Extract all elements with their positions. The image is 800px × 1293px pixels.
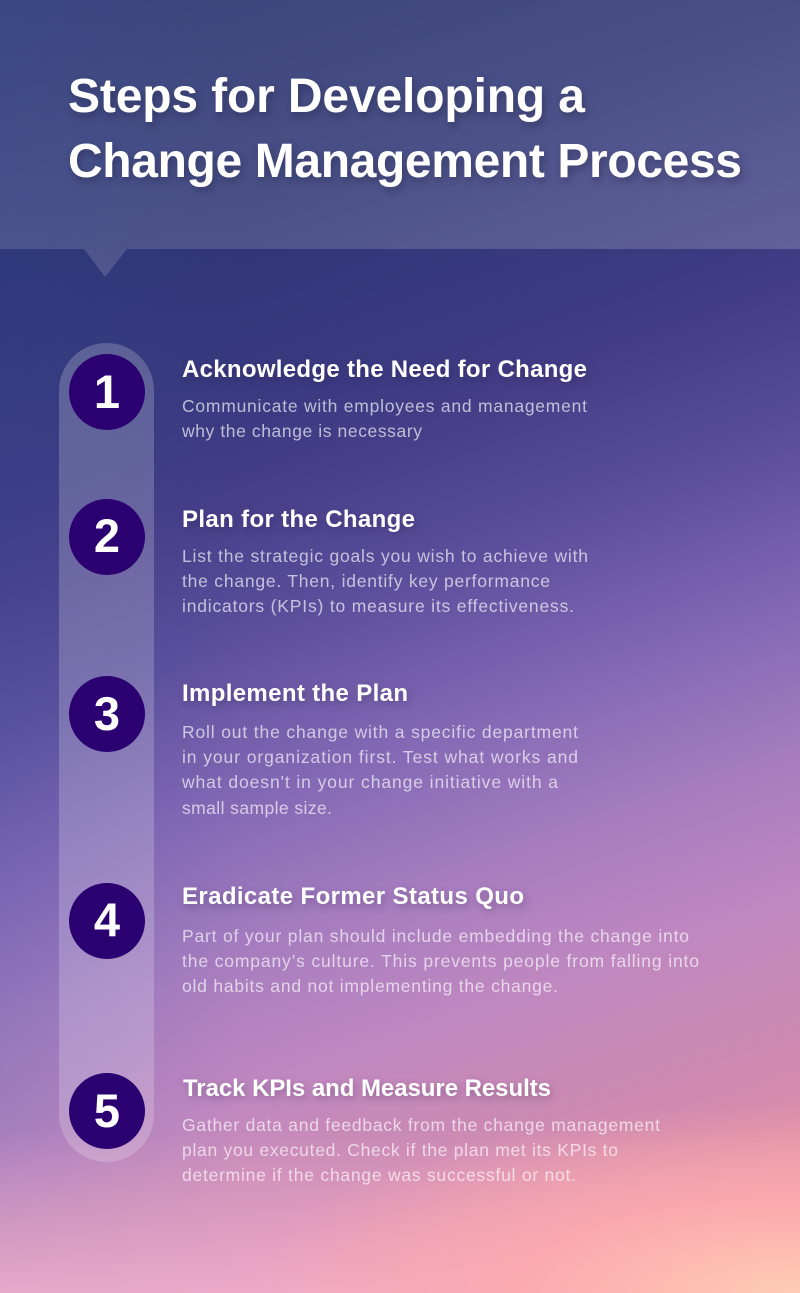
step 1 heading: Acknowledge the Need for Change <box>182 356 587 383</box>
step 2 description <box>182 546 588 616</box>
step 1 badge <box>69 354 145 430</box>
step 3 badge: 3 <box>94 687 120 740</box>
header panel <box>0 0 800 277</box>
step 2 badge: 2 <box>94 509 120 562</box>
step 2 description: indicators (KPIs) to measure its effectiveness. <box>182 596 574 616</box>
step 5 description: Gather data and feedback from the change management <box>182 1115 660 1135</box>
step 1 <box>69 354 587 441</box>
step 4 description: the company’s culture. This prevents people from falling into <box>182 951 699 971</box>
timeline pill <box>59 343 154 1162</box>
step 5 description: plan you executed. Check if the plan met its KPIs to <box>182 1140 618 1160</box>
step 5 <box>69 1073 660 1185</box>
step 1 description: Communicate with employees and management <box>182 396 587 416</box>
step 3 description <box>181 722 578 818</box>
step 2 badge <box>69 499 145 575</box>
step 4 badge: 4 <box>94 893 120 946</box>
step 5 badge: 5 <box>94 1084 120 1137</box>
step 4 <box>69 883 699 996</box>
step 4 description <box>182 926 699 996</box>
step 3 badge <box>69 676 145 752</box>
step 3 description: in your organization first. Test what works and <box>182 747 578 767</box>
step 2 description: the change. Then, identify key performance <box>182 571 550 591</box>
step 5 heading: Track KPIs and Measure Results <box>183 1075 551 1102</box>
step 3 description: Roll out the change with a specific department <box>182 722 578 742</box>
step 1 badge: 1 <box>94 365 120 418</box>
step 4 description: Part of your plan should include embedding the change into <box>182 926 689 946</box>
step 4 badge <box>69 883 145 959</box>
step 1 description: why the change is necessary <box>181 421 422 441</box>
step 4 heading: Eradicate Former Status Quo <box>182 883 524 910</box>
step 2 description: List the strategic goals you wish to achieve with <box>182 546 588 566</box>
step 4 description: old habits and not implementing the change. <box>182 976 558 996</box>
title: Change Management Process <box>68 135 742 188</box>
step 5 description <box>182 1115 660 1185</box>
title: Steps for Developing a <box>68 70 585 123</box>
step 5 description: determine if the change was successful or not. <box>182 1165 576 1185</box>
step 5 badge <box>69 1073 145 1149</box>
step 3 description: what doesn't in your change initiative with a <box>181 772 558 792</box>
step 3 heading: Implement the Plan <box>182 680 408 707</box>
step 1 description <box>181 396 587 441</box>
step 2 <box>69 499 588 616</box>
step 2 heading: Plan for the Change <box>182 506 415 533</box>
header pointer <box>84 249 127 277</box>
step 3 <box>69 676 578 818</box>
step 3 description: small sample size. <box>182 798 332 818</box>
title <box>68 70 742 188</box>
